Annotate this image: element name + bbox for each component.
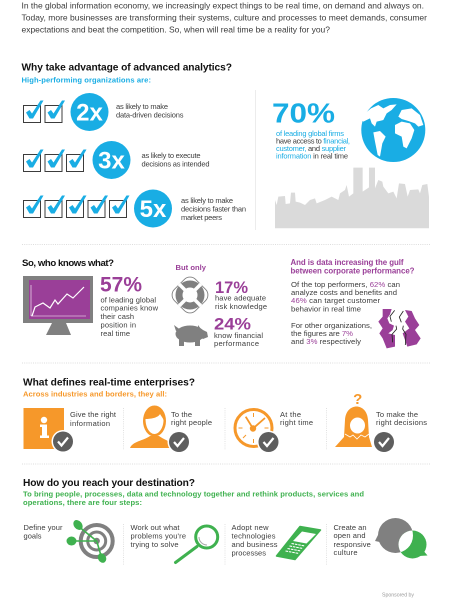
row: 2x likely: as likely to make [116,102,168,111]
row: 2x likely [24,93,184,131]
item: right decisions: To make the [376,410,418,419]
row: 3x likely: as likely to execute [142,151,200,160]
item: right information: information [70,419,110,428]
intro text: Today, more businesses are transforming their systems, culture and processes to meet demands, consumer [22,12,427,22]
stat: 17 percent [215,278,267,311]
stat: 17 percent: 17% [215,278,248,297]
step: define goals: goals [24,532,42,540]
item: right time: At the [280,410,301,419]
heading: who knows what: So, who knows what? [22,258,114,269]
heading: advanced analytics: Why take advantage of advanced analytics? [22,63,232,74]
intro text: In the global information economy, we increasingly expect things to be real time, on demand and always on. [22,0,424,10]
step: open culture: open and [334,531,366,540]
stat: 24 percent: performance [214,339,259,348]
step: adopt technologies: Adopt new [232,523,269,532]
stat: 57 percent [100,274,159,338]
step: open culture: Create an [334,523,366,532]
step: adopt technologies: technologies [232,532,276,540]
row: 2x likely: data-driven decisions [116,110,184,120]
step: open culture: culture [334,548,358,557]
stat: 70 percent: customer, and supplier [276,144,346,153]
icon: monitor with chart [23,276,93,335]
row: 3x likely: 3x [98,148,125,174]
item: right decisions [335,391,427,454]
heading: gulf in performance [290,258,415,276]
step: open culture [334,518,428,558]
sponsor note: Sponsored by [382,593,414,599]
icon: torn gulf [378,309,421,348]
step: work out problems: problems you're [130,532,186,540]
stat: 57 percent: real time [100,329,130,338]
intro text [22,0,427,34]
step: work out problems [130,523,218,562]
item: right information: Give the right [70,410,117,419]
item: right time [235,410,313,454]
text: top performers [291,280,400,346]
text: top performers: Of the top performers, 62% can [291,280,400,289]
row: 3x likely [24,141,210,179]
step: work out problems: Work out what [130,523,180,532]
subheading: across industries: Across industries and borders, they all: [23,390,167,398]
item: right decisions: ? [353,391,362,408]
item: right information [24,408,117,453]
item: right time: right time [280,418,313,427]
icon: globe [361,98,425,162]
step: adopt technologies [232,523,320,560]
step: define goals [24,518,113,564]
stat: 70 percent: information in real time [276,152,348,160]
heading: reach your destination: How do you reach your destination? [23,478,195,489]
stat: 24 percent: know financial [214,331,263,340]
step: adopt technologies: and business [232,540,278,549]
step: define goals: Define your [24,523,63,532]
item: right people: To the [171,410,192,419]
text: top performers: behavior in real time [291,304,361,314]
stat: 57 percent: companies know [100,304,159,313]
row: 5x likely: decisions faster than [181,204,246,214]
heading: gulf in performance: between corporate performance? [290,266,415,276]
heading: gulf in performance: And is data increasing the gulf [290,258,404,267]
stat: 70 percent: of leading global firms [276,129,344,138]
subheading: four steps: To bring people, processes, data and technology together and rethink products, services and [23,490,364,498]
heading: real-time enterprises: What defines real-time enterprises? [23,378,195,389]
row: 5x likely [24,190,246,228]
stat: 24 percent: 24% [214,314,251,334]
icon: piggy bank [174,325,208,346]
step: adopt technologies: processes [232,548,266,558]
subheading: high-performing organizations: High-performing organizations are: [22,76,151,84]
row: 2x likely: 2x [76,100,103,126]
text: top performers: and 3% respectively [291,337,361,346]
row: 3x likely: decisions as intended [142,160,210,168]
intro text: expectations and beat the competition. So, when will real time be a reality for you? [22,24,330,34]
label: but only: But only [176,263,207,272]
text: top performers: For other organizations, [291,321,372,330]
subheading: four steps: operations, there are four steps: [23,498,142,507]
stat: 57 percent: position in [100,320,136,330]
text: top performers: analyze costs and benefits and [291,288,397,297]
stat: 24 percent [214,314,263,348]
stat: 57 percent: of leading global [100,296,156,305]
stat: 70 percent: 70% [272,98,335,128]
item: right decisions: right decisions [376,418,427,427]
row: 5x likely: market peers [181,213,222,222]
stat: 57 percent: their cash [100,312,134,321]
subheading: four steps [23,490,364,507]
stat: 17 percent: have adequate [215,294,266,303]
stat: 70 percent: have access to financial, [276,136,350,146]
step: work out problems: trying to solve [130,540,178,549]
row: 5x likely: 5x [140,196,167,223]
stat: 17 percent: risk knowledge [215,302,267,311]
item: right people [130,406,212,454]
item: right people: right people [171,418,212,427]
row: 5x likely: as likely to make [181,196,233,205]
stat: 70 percent [272,98,350,160]
step: open culture: responsive [334,540,371,549]
graphic: city skyline [275,168,429,228]
text: top performers: the figures are 7% [291,329,353,338]
stat: 57 percent: 57% [100,274,142,297]
text: top performers: 46% can target customer [291,296,380,305]
icon: lifebuoy [169,274,211,316]
